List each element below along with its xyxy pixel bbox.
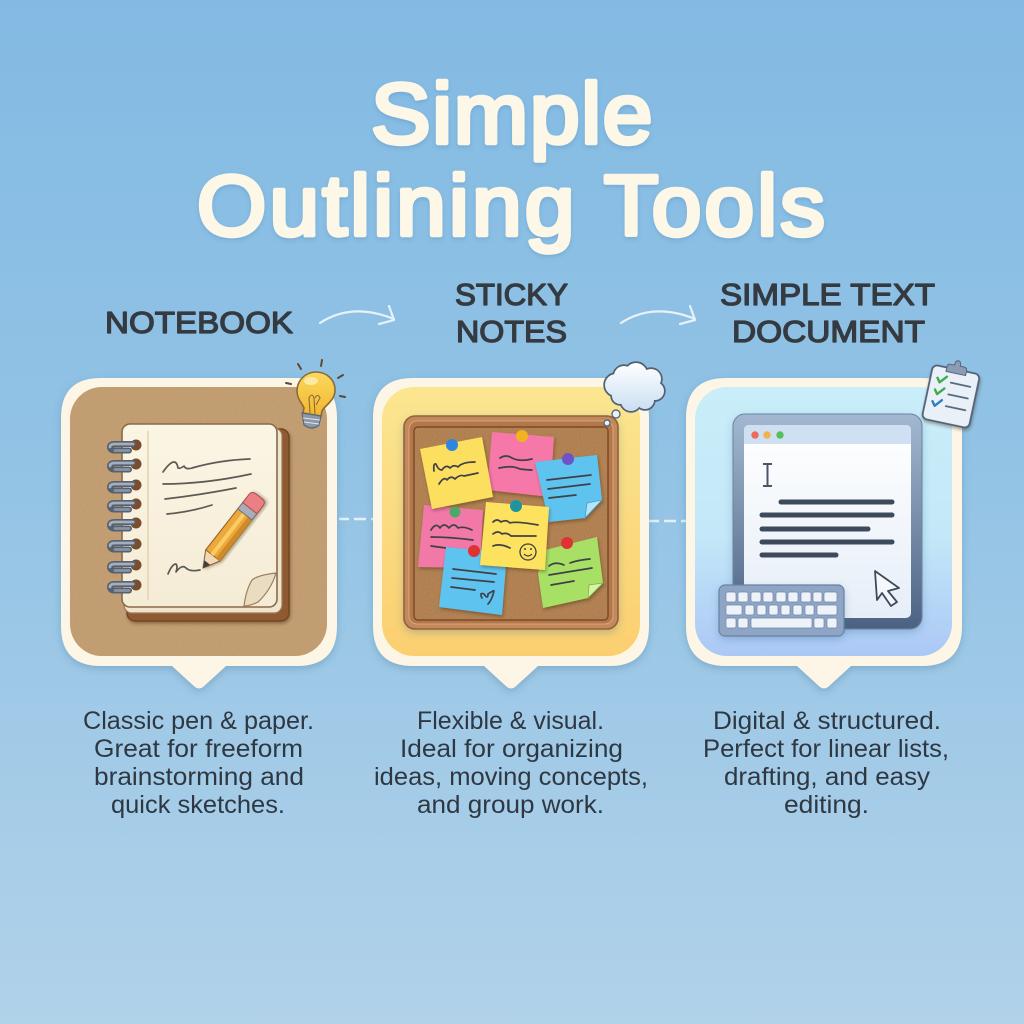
text block: notebook description: quick sketches. <box>111 791 285 819</box>
spiral binding <box>110 440 142 590</box>
panel: sticky notes <box>373 378 649 688</box>
text block: document description: Digital & structured. <box>713 707 941 735</box>
card frame with pointer <box>373 378 649 688</box>
handwriting scribbles <box>163 459 251 574</box>
pencil <box>196 491 266 574</box>
mouse pointer <box>875 571 899 606</box>
text block: notebook description <box>83 707 314 819</box>
icon: lightbulb <box>286 360 345 428</box>
card frame with pointer <box>61 378 337 688</box>
text block: sticky notes description <box>374 707 648 819</box>
text block: sticky notes description: ideas, moving concepts, <box>374 763 648 791</box>
dashed connector: first gap <box>339 518 373 520</box>
title: Outlining Tools <box>197 159 825 254</box>
icon: thought cloud <box>604 363 664 426</box>
under pages <box>124 428 282 613</box>
note: yellow center with smiley <box>480 502 549 570</box>
note: blue upper right <box>535 455 602 522</box>
main page <box>122 424 277 607</box>
kraft paper grain <box>70 387 327 656</box>
note: pink upper <box>487 432 554 497</box>
push pins <box>446 430 574 557</box>
title: Simple <box>371 67 652 162</box>
window frame <box>733 414 922 629</box>
text block: document description: Perfect for linear lists, <box>703 735 949 763</box>
heading: simple text document <box>720 277 935 349</box>
heading: sticky notes: STICKY <box>455 277 568 312</box>
page curl <box>244 573 276 606</box>
window buttons <box>751 431 784 439</box>
text block: document description: drafting, and easy <box>724 763 931 791</box>
heading: notebook: NOTEBOOK <box>105 305 293 340</box>
text cursor <box>763 464 772 486</box>
margin line <box>147 431 149 600</box>
text block: document description <box>703 707 949 819</box>
card blue fill <box>695 387 952 656</box>
panel: notebook <box>61 378 337 688</box>
text block: document description: editing. <box>784 791 869 819</box>
keyboard <box>719 585 844 636</box>
dashed connector: second gap <box>649 520 686 522</box>
frame bevel <box>409 421 613 624</box>
cork grain <box>415 428 607 619</box>
text block: notebook description: brainstorming and <box>94 763 304 791</box>
arrow: notebook to sticky notes <box>320 306 394 324</box>
card kraft fill <box>70 387 327 656</box>
text block: sticky notes description: Flexible & visual. <box>417 707 604 735</box>
card yellow fill <box>382 387 640 656</box>
note: blue lower <box>439 547 507 615</box>
document text lines <box>762 502 892 555</box>
text block: sticky notes description: and group work. <box>417 791 604 819</box>
heading: simple text document: SIMPLE TEXT <box>720 277 935 312</box>
panel: simple text document <box>686 378 962 688</box>
corkboard surface <box>414 427 608 620</box>
heading: sticky notes: NOTES <box>456 314 567 349</box>
corkboard frame <box>404 416 618 629</box>
note: yellow upper left <box>420 437 493 509</box>
note: pink lower left <box>418 505 483 568</box>
heading: simple text document: DOCUMENT <box>732 314 925 349</box>
notebook back cover <box>127 429 289 621</box>
heading: sticky notes <box>455 277 568 349</box>
title bar <box>744 425 911 444</box>
text block: sticky notes description: Ideal for organizing <box>400 735 623 763</box>
text block: notebook description: Great for freeform <box>94 735 303 763</box>
document screen <box>744 425 911 618</box>
title <box>197 67 825 254</box>
text block: notebook description: Classic pen & paper. <box>83 707 314 735</box>
arrow: sticky notes to document <box>621 306 695 324</box>
card frame with pointer <box>686 378 962 688</box>
icon: clipboard checklist <box>922 356 982 428</box>
note: green <box>538 537 603 608</box>
